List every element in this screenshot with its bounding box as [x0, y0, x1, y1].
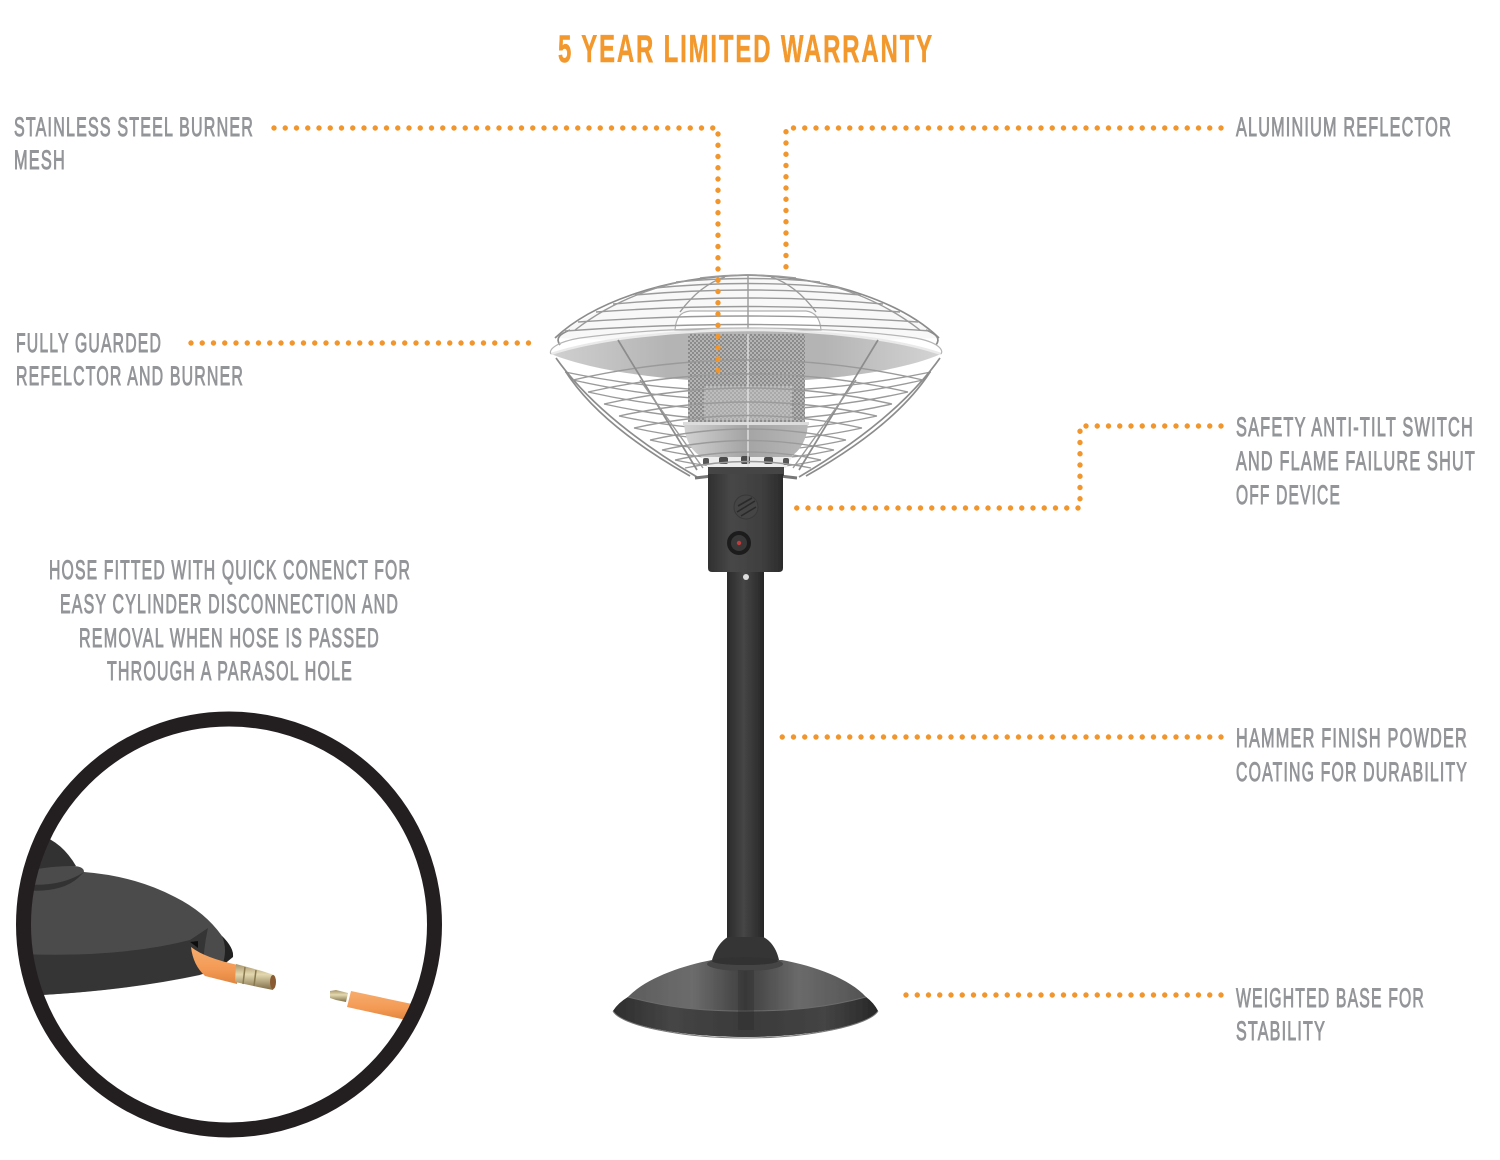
inset loose hose and plug [330, 990, 412, 1020]
label: fully guarded reflector and burner: REFELCTOR AND BURNER [16, 361, 244, 391]
label: hose quick connect: HOSE FITTED WITH QUICK CONENCT FOR [49, 555, 411, 585]
label: fully guarded reflector and burner [16, 328, 244, 391]
label: weighted base [1236, 983, 1425, 1046]
label: safety device [1236, 412, 1476, 510]
leader: weighted base [902, 992, 1221, 998]
heater upper wire guard [555, 275, 939, 345]
label: fully guarded reflector and burner: FULLY GUARDED [16, 328, 162, 358]
leader: aluminium reflector [786, 128, 1221, 268]
label: safety device: OFF DEVICE [1236, 480, 1341, 510]
patio heater product illustration [550, 275, 942, 1038]
label: hose quick connect: EASY CYLINDER DISCONNECTION AND [60, 589, 399, 619]
inset ring [24, 719, 434, 1130]
label: hammer finish [1236, 723, 1468, 787]
weighted base [613, 937, 878, 1038]
heater reflector disc [550, 328, 942, 382]
label: hose quick connect [49, 555, 411, 686]
inset base shell [20, 835, 233, 996]
inset: hose quick connect detail [20, 719, 434, 1130]
label: hose quick connect: REMOVAL WHEN HOSE IS PASSED [79, 623, 380, 653]
leader: fully guarded [191, 340, 533, 346]
control housing with knob and switch [708, 467, 784, 572]
pole [727, 572, 764, 944]
leader: safety switch [796, 426, 1221, 508]
title: 5 YEAR LIMITED WARRANTY [558, 28, 934, 71]
label: stainless steel burner mesh: STAINLESS STEEL BURNER [14, 112, 254, 142]
burner mesh and cup [683, 334, 809, 470]
heater lower guard back wires [565, 372, 931, 468]
label: stainless steel burner mesh: MESH [14, 145, 66, 175]
heater lower guard front wires [556, 340, 940, 478]
inset attached hose and socket [191, 947, 276, 990]
leader: hammer finish [782, 734, 1221, 740]
leader: stainless steel burner mesh [274, 128, 718, 372]
label: stainless steel burner mesh [14, 112, 254, 175]
label: hose quick connect: THROUGH A PARASOL HOLE [107, 656, 353, 686]
label: weighted base: STABILITY [1236, 1016, 1326, 1046]
